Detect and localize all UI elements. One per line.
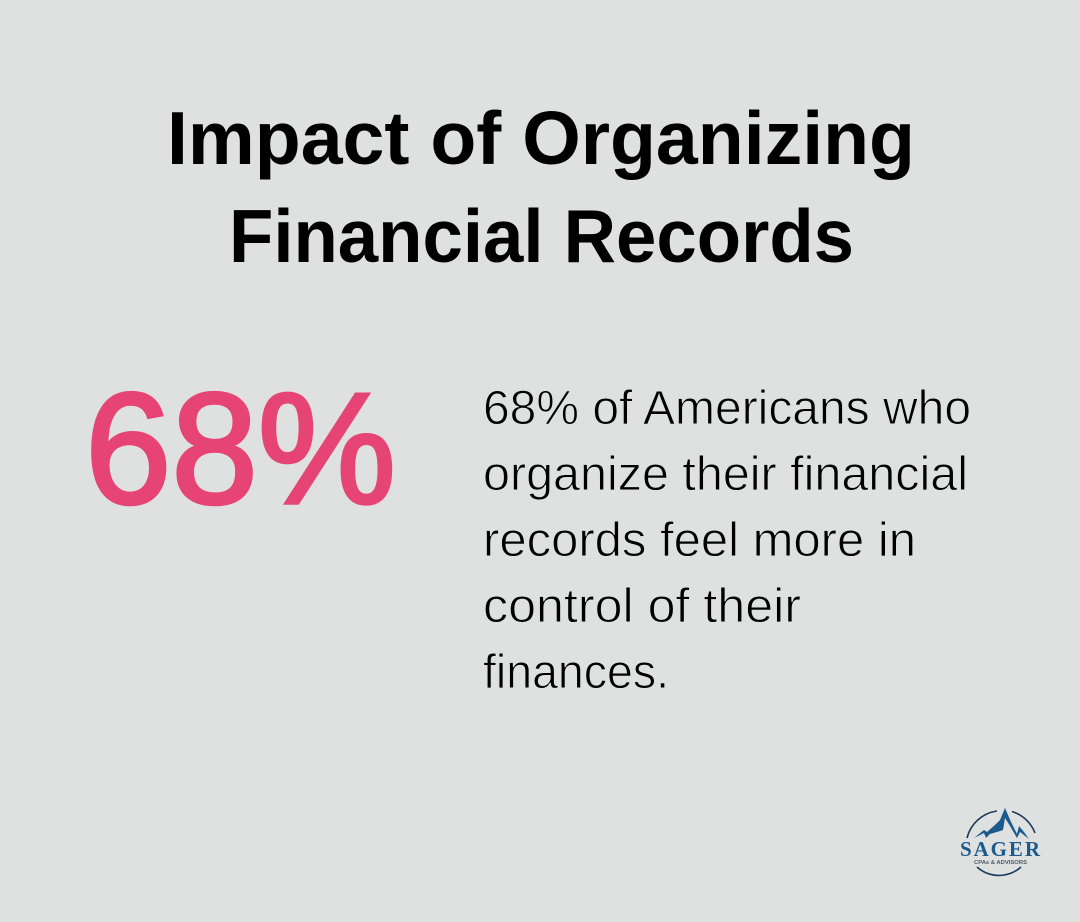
description text: records feel more in: [483, 514, 916, 567]
title: Impact of Organizing: [167, 96, 915, 180]
logo tagline: CPAs & ADVISORS: [974, 860, 1028, 866]
logo wordmark: SAGER: [960, 837, 1041, 861]
title: [167, 96, 915, 278]
description text: control of their: [483, 580, 801, 633]
description text: [483, 382, 971, 699]
logo: Sager CPAs & Advisors: [960, 808, 1041, 875]
description text: organize their financial: [483, 448, 968, 501]
big statistic: 68%: 68%: [85, 361, 396, 537]
description text: 68% of Americans who: [483, 382, 971, 435]
description text: finances.: [483, 646, 669, 699]
logo ring arcs: [967, 811, 1035, 875]
logo mountains: [974, 808, 1029, 839]
title: Financial Records: [229, 194, 854, 278]
